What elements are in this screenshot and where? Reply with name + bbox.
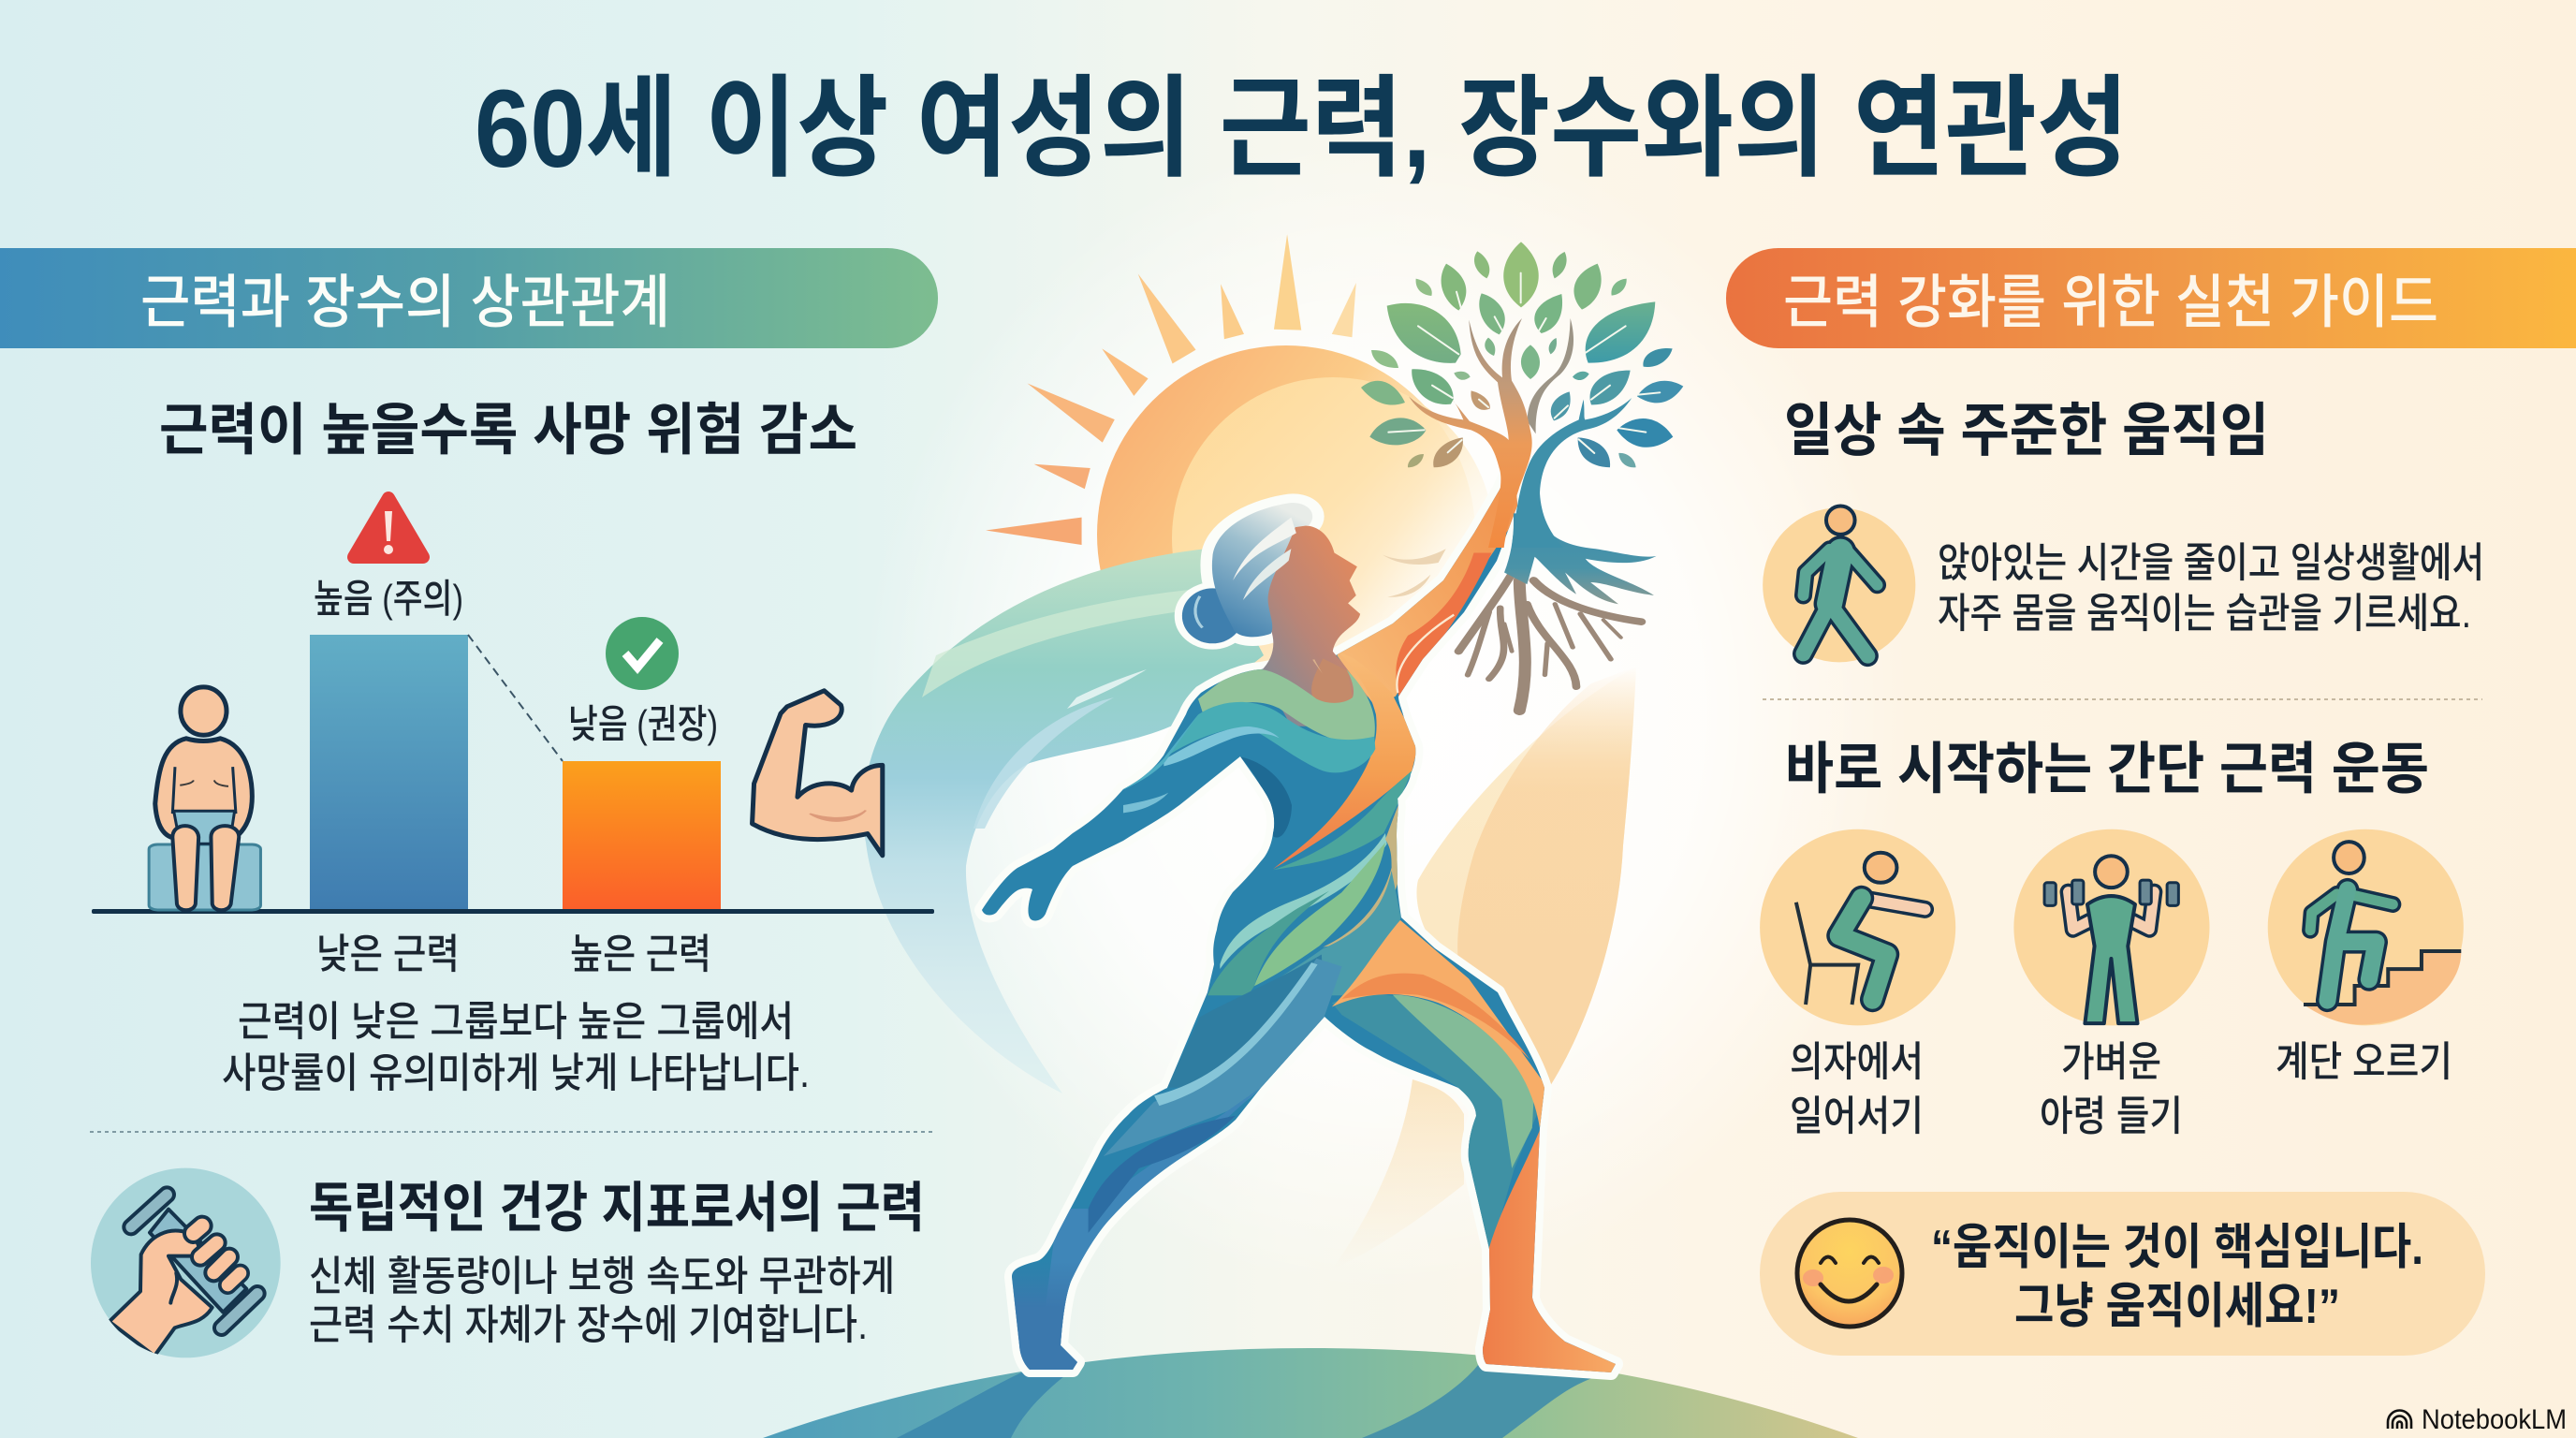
- tree roots: [1458, 513, 1657, 711]
- illustration: woman, sun and tree of life: [763, 234, 1858, 1438]
- left section banner: [0, 248, 938, 348]
- icon: hand gripping dumbbell: [91, 1168, 281, 1357]
- panel: correlation of strength and longevity: [0, 248, 938, 1357]
- title: 60세 이상 여성의 근력, 장수와의 연관성: [475, 67, 2129, 191]
- sun with rays: [986, 234, 1494, 724]
- tree of life: [1361, 242, 1683, 711]
- icon: walking person: [1763, 506, 1915, 662]
- quote text: [1931, 1221, 2423, 1334]
- axis label: low strength: 낮은 근력: [316, 932, 460, 977]
- label: light dumbbell lift: 아령 들기: [2040, 1093, 2183, 1139]
- text: independent indicator description: 신체 활동량이나 보행 속도와 무관하게: [309, 1254, 895, 1299]
- label: climbing stairs: 계단 오르기: [2276, 1039, 2452, 1085]
- quote text: 그냥 움직이세요!”: [2014, 1280, 2340, 1334]
- heading: daily movement: 일상 속 주준한 움직임: [1784, 399, 2269, 463]
- label: sit to stand: 일어서기: [1790, 1093, 1924, 1139]
- left section banner: 근력과 장수의 상관관계: [140, 271, 670, 335]
- bar: low strength group: [310, 635, 468, 910]
- label: sit to stand: [1790, 1039, 1924, 1139]
- woman figure: [982, 443, 1618, 1378]
- label: light dumbbell lift: [2040, 1039, 2183, 1139]
- text: independent indicator description: 근력 수치 자체가 장수에 기여합니다.: [309, 1302, 868, 1348]
- text: chart explanation: [222, 999, 810, 1096]
- text: reduce sitting: 앉아있는 시간을 줄이고 일상생활에서: [1938, 540, 2484, 586]
- right section banner: [1726, 248, 2576, 348]
- woman's head with hair and bun: [1182, 503, 1446, 726]
- panel: strength practice guide: [1726, 248, 2576, 1356]
- hill: [763, 1348, 1858, 1438]
- heading: mortality risk: 근력이 높을수록 사망 위험 감소: [159, 399, 857, 462]
- callout: quote: [1760, 1192, 2485, 1356]
- quote text: “움직이는 것이 핵심입니다.: [1931, 1221, 2423, 1275]
- text: independent indicator description: [309, 1254, 895, 1348]
- label: low recommended: 낮음 (권장): [568, 702, 718, 746]
- text: chart explanation: 근력이 낮은 그룹보다 높은 그룹에서: [238, 999, 794, 1045]
- bar: high strength group: [563, 761, 721, 910]
- flowing scarf: [863, 549, 1264, 1093]
- axis label: high strength: 높은 근력: [570, 932, 711, 977]
- bar chart: low vs high strength: [92, 498, 934, 977]
- right section banner: 근력 강화를 위한 실천 가이드: [1783, 271, 2438, 335]
- icon: flexed arm: [753, 691, 883, 856]
- icon: warning triangle: [354, 498, 423, 557]
- icon: check circle: [606, 617, 679, 690]
- text: reduce sitting: 자주 몸을 움직이는 습관을 기르세요.: [1938, 591, 2471, 637]
- icon: sit to stand: [1760, 829, 1955, 1025]
- label: high caution: 높음 (주의): [314, 577, 463, 621]
- label: sit to stand: 의자에서: [1790, 1039, 1924, 1085]
- heading: independent health indicator: 독립적인 건강 지표로서의 근력: [309, 1178, 925, 1239]
- icon: climbing stairs: [2268, 829, 2464, 1025]
- heading: simple strength exercises: 바로 시작하는 간단 근력 운동: [1785, 738, 2429, 800]
- icon: light dumbbell lift: [2013, 829, 2210, 1025]
- pale light beams: [1332, 667, 1636, 1269]
- icon: smiley face: [1797, 1220, 1902, 1327]
- tree trunk, branches and leaves: [1361, 242, 1683, 548]
- text: reduce sitting: [1938, 540, 2484, 637]
- text: chart explanation: 사망률이 유의미하게 낮게 나타납니다.: [222, 1050, 810, 1096]
- label: light dumbbell lift: 가벼운: [2061, 1039, 2161, 1085]
- icon: seated person: [149, 687, 260, 910]
